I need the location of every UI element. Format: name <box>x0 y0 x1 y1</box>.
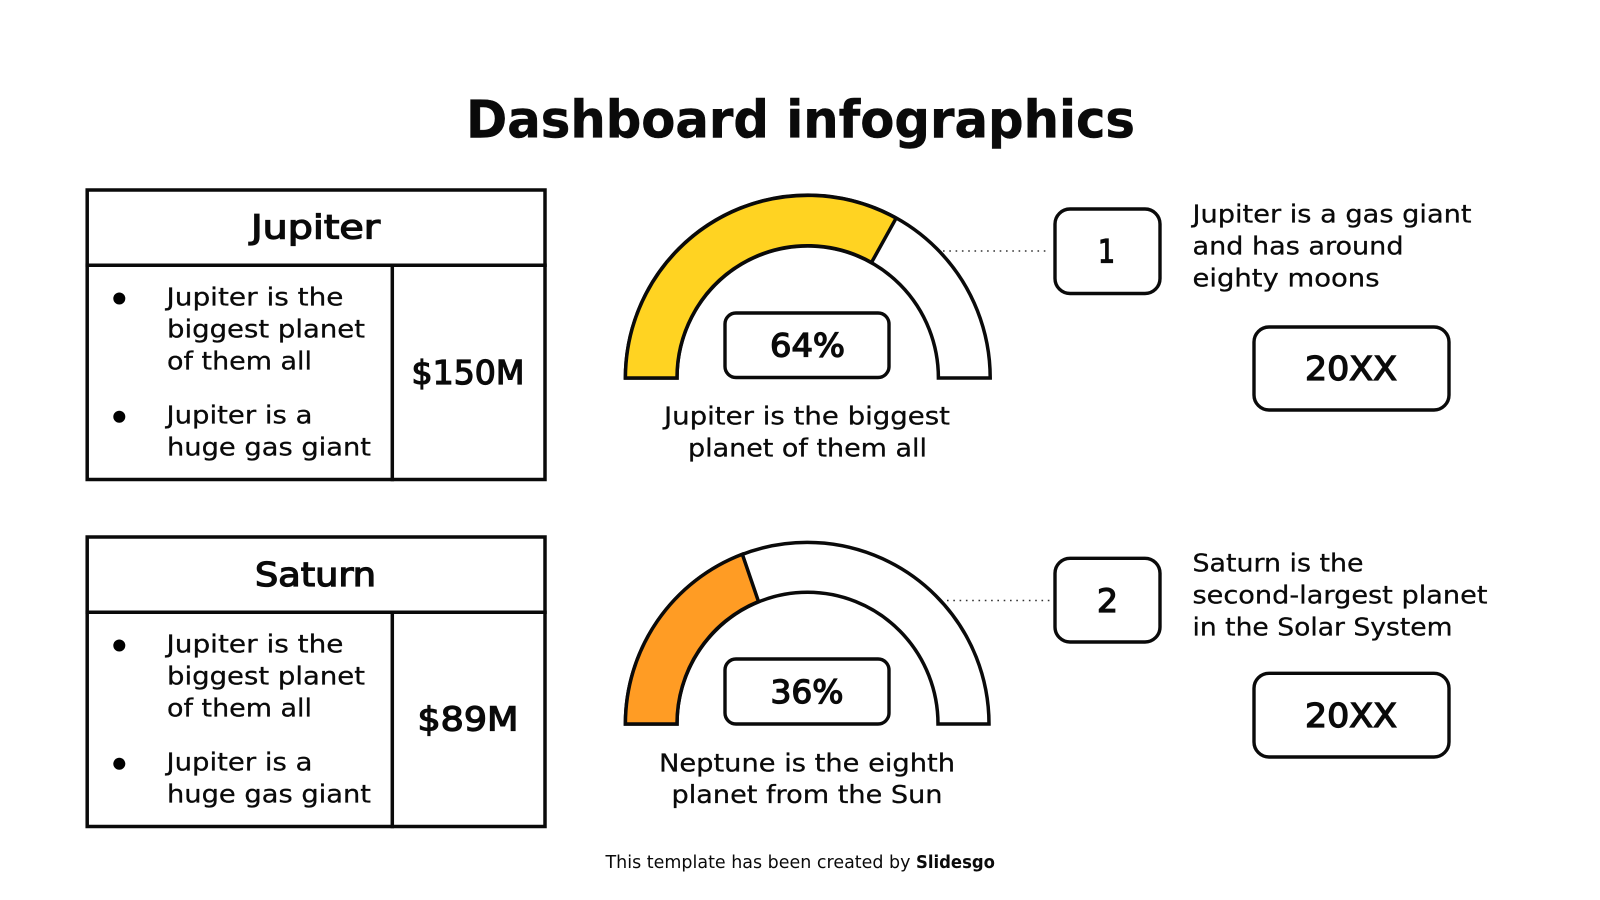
description 1: eighty moons <box>1192 263 1380 292</box>
gauge track <box>625 195 990 378</box>
panel: gauge 64% <box>625 195 990 462</box>
gauge fill: 64% yellow <box>625 195 896 378</box>
number box 2: 2 <box>1097 582 1118 620</box>
year box 2 <box>1254 673 1449 757</box>
gauge fill: 36% orange <box>625 554 758 724</box>
gauge caption <box>659 748 955 809</box>
number box 1 <box>1055 209 1160 294</box>
connector: gauge 1 to box 1 <box>943 250 1050 252</box>
year box 1: 20XX <box>1305 349 1397 388</box>
table grid: Saturn <box>87 537 545 826</box>
gauge caption <box>662 402 950 462</box>
panel: item 1 details <box>1055 199 1472 410</box>
panel: Saturn table <box>87 537 545 826</box>
panel: Jupiter table <box>87 190 545 480</box>
heading: Jupiter: Jupiter <box>249 208 381 247</box>
bullet list: Jupiter: of them all <box>167 347 312 376</box>
number box 2 <box>1055 558 1160 642</box>
bullet list: Saturn: Jupiter is a <box>164 748 312 777</box>
bullet list: Saturn: biggest planet <box>167 661 365 690</box>
percentage pill: 64% <box>770 326 845 364</box>
title: Dashboard infographics <box>466 90 1135 150</box>
bullet list: Jupiter: huge gas giant <box>167 433 371 462</box>
percentage pill: 36% <box>770 673 844 711</box>
footer credit: This template has been created by <box>605 853 910 873</box>
panel: item 2 details <box>1055 548 1488 757</box>
percentage pill <box>725 313 889 378</box>
gauge track <box>625 542 989 724</box>
table grid: Jupiter <box>87 190 545 480</box>
description 1: and has around <box>1192 231 1404 260</box>
bullet list: Saturn: Jupiter is the <box>164 629 344 658</box>
gauge caption: Jupiter is the biggest <box>662 402 950 430</box>
description 2: Saturn is the <box>1192 548 1364 577</box>
description 1: Jupiter is a gas giant <box>1190 199 1472 228</box>
year box 2: 20XX <box>1305 696 1397 735</box>
year box 1 <box>1254 327 1449 410</box>
panel: gauge 36% <box>625 542 989 809</box>
bullet list: Jupiter: Jupiter is a <box>164 401 312 430</box>
bullet list: Saturn: of them all <box>167 694 312 723</box>
bullet list: Saturn: huge gas giant <box>167 780 371 809</box>
bullet list: Jupiter <box>113 282 371 462</box>
bullet list: Jupiter: Jupiter is the <box>164 282 344 311</box>
gauge caption: planet of them all <box>688 433 927 462</box>
gauge caption: Neptune is the eighth <box>659 748 955 777</box>
description 2: second-largest planet <box>1192 580 1488 609</box>
connector: gauge 2 to box 2 <box>947 600 1051 602</box>
description 2: in the Solar System <box>1192 613 1452 642</box>
heading: Saturn: Saturn <box>255 555 376 594</box>
footer credit: Slidesgo <box>916 853 995 873</box>
gauge caption: planet from the Sun <box>672 780 942 809</box>
number box 1: 1 <box>1098 232 1115 270</box>
value: $150M: $150M <box>412 353 524 392</box>
value: $89M: $89M <box>418 700 518 739</box>
description 1 <box>1190 199 1472 292</box>
bullet list: Saturn <box>113 629 371 809</box>
description 2 <box>1192 548 1488 642</box>
percentage pill <box>725 659 889 724</box>
bullet list: Jupiter: biggest planet <box>167 314 365 343</box>
